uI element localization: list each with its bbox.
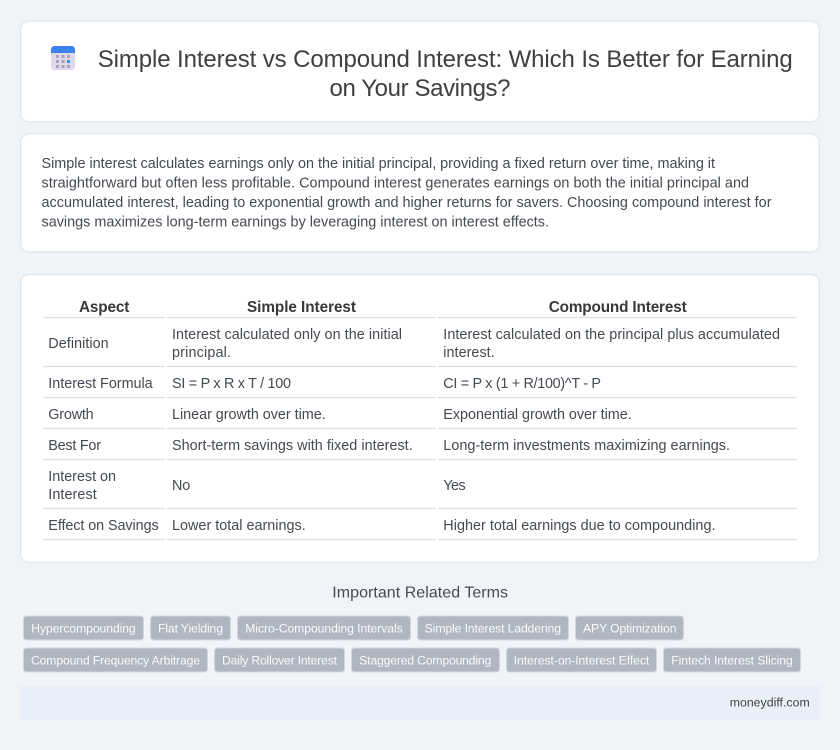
table row: interest formula: Interest Formula (48, 376, 153, 392)
tag (506, 648, 656, 672)
table row: growth: Exponential growth over time. (443, 407, 632, 423)
table row: definition: Interest calculated only on the initial (172, 327, 402, 343)
tag: Compound Frequency Arbitrage (31, 653, 200, 667)
table row: interest formula: CI = P x (1 + R/100)^T - P (443, 376, 601, 392)
table row: growth (43, 407, 797, 428)
table row: effect on savings: Lower total earnings. (172, 518, 306, 534)
table row: interest on interest: Interest on (48, 469, 116, 485)
table row: definition: interest. (443, 345, 495, 361)
tag (24, 616, 144, 640)
title (98, 46, 793, 102)
tag: Simple Interest Laddering (425, 621, 561, 635)
table header row: Compound Interest (549, 299, 687, 316)
tag: Staggered Compounding (359, 653, 491, 667)
table row: interest on interest: Interest (48, 487, 97, 503)
text block: introduction: Simple interest calculates earnings only on the initial principal, providing a fixed return over time, making it (42, 156, 715, 172)
text block: introduction: straightforward but often less profitable. Compound interest generates earnings on both the initial principal and (42, 176, 749, 192)
text block: introduction: accumulated interest, leading to exponential growth and higher returns for savers. Choosing compound interest for (42, 195, 772, 211)
tag: Interest-on-Interest Effect (514, 653, 650, 667)
tag (214, 648, 344, 672)
title: Simple Interest vs Compound Interest: Which Is Better for Earning (98, 46, 793, 73)
panel: header (21, 21, 819, 122)
panel: introduction (21, 134, 819, 252)
table row: best for: Long-term investments maximizing earnings. (443, 438, 730, 454)
tag (24, 648, 208, 672)
table row: effect on savings (43, 518, 797, 540)
text block: introduction: savings maximizes long-term earnings by leveraging interest on interest effects. (42, 215, 549, 231)
title: on Your Savings? (330, 75, 510, 102)
footer (20, 686, 820, 720)
tag (238, 616, 410, 640)
tag: Daily Rollover Interest (222, 653, 338, 667)
tag (418, 616, 568, 640)
table row: effect on savings: Higher total earnings due to compounding. (443, 518, 716, 534)
table row: best for: Best For (48, 438, 101, 454)
table row: growth: Linear growth over time. (172, 407, 326, 423)
tag: Hypercompounding (31, 621, 136, 635)
table row: growth: Growth (48, 407, 94, 423)
table row: interest formula (43, 376, 797, 398)
table row: interest formula: SI = P x R x T / 100 (172, 376, 291, 392)
tags: related terms (24, 616, 800, 672)
tag: Fintech Interest Slicing (671, 653, 793, 667)
tag: Micro-Compounding Intervals (245, 621, 403, 635)
table row: interest on interest: No (172, 478, 190, 494)
table row: best for (43, 438, 797, 460)
heading: important related terms: Important Related Terms (332, 585, 508, 602)
tag (352, 648, 500, 672)
tag (576, 616, 684, 640)
tag (150, 616, 230, 640)
table header row (43, 299, 797, 318)
table row: interest on interest (43, 469, 797, 508)
panel: comparison table (21, 274, 819, 562)
table row: definition: Interest calculated on the principal plus accumulated (443, 327, 780, 343)
table row: definition: Definition (48, 336, 109, 352)
table row: definition (43, 327, 797, 366)
icon: calendar (51, 46, 75, 70)
tag (664, 648, 800, 672)
table row: effect on savings: Effect on Savings (48, 518, 159, 534)
text block: introduction (42, 156, 772, 231)
table row: interest on interest: Yes (443, 478, 466, 494)
tag: APY Optimization (583, 621, 676, 635)
table row: best for: Short-term savings with fixed interest. (172, 438, 413, 454)
table header row: Aspect (79, 299, 129, 316)
footer: moneydiff.com (730, 696, 810, 710)
table row: definition: principal. (172, 345, 231, 361)
tag: Flat Yielding (158, 621, 223, 635)
table header row: Simple Interest (247, 299, 356, 316)
